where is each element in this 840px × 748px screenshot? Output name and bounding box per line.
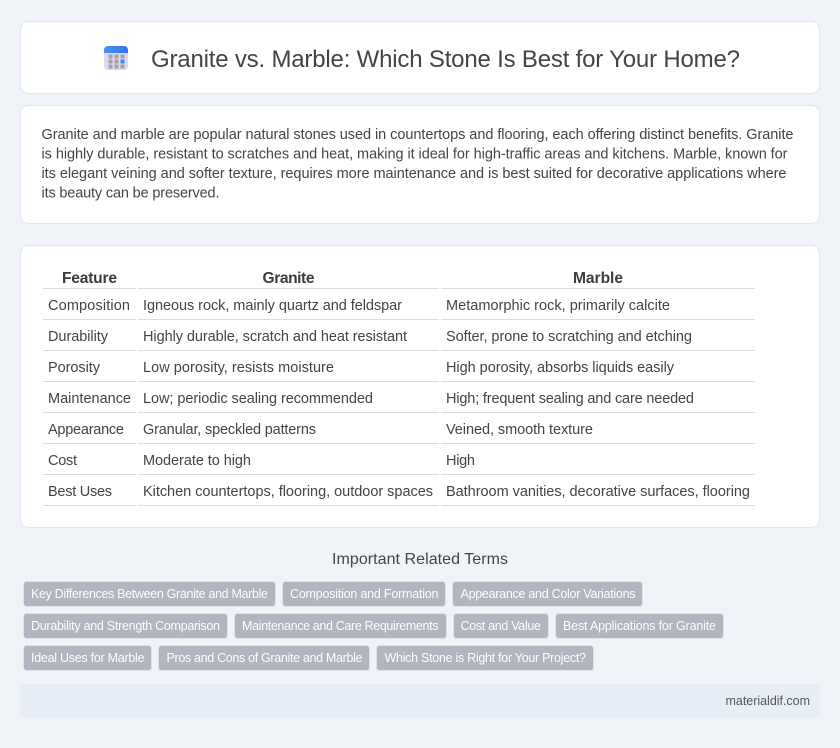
table header row: Feature xyxy=(62,270,117,287)
tag xyxy=(556,614,724,638)
heading: important related terms: Important Related Terms xyxy=(332,551,508,568)
table row: best uses: Best Uses xyxy=(48,484,112,500)
title: Granite vs. Marble: Which Stone Is Best for Your Home? xyxy=(151,46,740,73)
table row: composition: Composition xyxy=(48,298,130,314)
table row: best uses: Kitchen countertops, flooring, outdoor spaces xyxy=(143,484,433,500)
panel: comparison table xyxy=(20,246,820,528)
table row: durability: Highly durable, scratch and heat resistant xyxy=(143,329,407,345)
tag xyxy=(282,582,446,606)
tag: Durability and Strength Comparison xyxy=(31,619,220,633)
table row: porosity: Low porosity, resists moisture xyxy=(143,360,334,376)
table row: durability xyxy=(43,329,755,351)
intro paragraph: its elegant veining and softer texture, requires more maintenance and is best suited for decorative applications where xyxy=(42,166,786,182)
table row: cost: Cost xyxy=(48,453,77,469)
tag xyxy=(24,614,228,638)
table row: best uses xyxy=(43,484,755,506)
table row: maintenance: High; frequent sealing and care needed xyxy=(446,391,694,407)
table row: porosity: High porosity, absorbs liquids easily xyxy=(446,360,675,376)
table row: cost: Moderate to high xyxy=(143,453,251,469)
table row: maintenance: Low; periodic sealing recommended xyxy=(143,391,373,407)
table row: porosity: Porosity xyxy=(48,360,101,376)
tag xyxy=(454,614,548,638)
icon: calendar xyxy=(104,46,128,70)
footer xyxy=(20,684,820,718)
tag xyxy=(24,646,152,670)
intro paragraph: is highly durable, resistant to scratches and heat, making it ideal for high-traffic areas and kitchens. Marble, known for xyxy=(42,146,788,162)
table row: best uses: Bathroom vanities, decorative surfaces, flooring xyxy=(446,484,750,500)
tag: Best Applications for Granite xyxy=(563,619,716,633)
intro paragraph: its beauty can be preserved. xyxy=(42,186,220,202)
table header row: Marble xyxy=(573,270,623,287)
tag: Pros and Cons of Granite and Marble xyxy=(166,651,363,665)
table header row xyxy=(43,270,755,289)
tag xyxy=(234,614,446,638)
related terms tags xyxy=(24,582,724,670)
tag: Cost and Value xyxy=(460,619,541,633)
tag: Composition and Formation xyxy=(290,587,439,601)
table row: durability: Softer, prone to scratching and etching xyxy=(446,329,692,345)
tag xyxy=(452,582,642,606)
table row: cost: High xyxy=(446,453,475,469)
table row: appearance: Granular, speckled patterns xyxy=(143,422,316,438)
tag xyxy=(24,582,276,606)
tag: Ideal Uses for Marble xyxy=(31,651,145,665)
table row: composition xyxy=(43,298,755,320)
table row: appearance: Veined, smooth texture xyxy=(446,422,593,438)
table row: durability: Durability xyxy=(48,329,109,345)
table row: appearance: Appearance xyxy=(48,422,124,438)
panel: introduction xyxy=(20,106,820,224)
panel: header xyxy=(20,22,820,94)
tag xyxy=(376,646,594,670)
table row: maintenance xyxy=(43,391,755,413)
footer source text: materialdif.com xyxy=(726,694,810,708)
tag: Which Stone is Right for Your Project? xyxy=(384,651,586,665)
intro paragraph: Granite and marble are popular natural stones used in countertops and flooring, each offering distinct benefits. Granite xyxy=(42,127,794,143)
tag xyxy=(158,646,370,670)
table row: composition: Igneous rock, mainly quartz and feldspar xyxy=(143,298,402,314)
tag: Appearance and Color Variations xyxy=(460,587,636,601)
table row: composition: Metamorphic rock, primarily calcite xyxy=(446,298,670,314)
table header row: Granite xyxy=(262,270,315,287)
tag: Key Differences Between Granite and Marble xyxy=(31,587,268,601)
table row: maintenance: Maintenance xyxy=(48,391,131,407)
tag: Maintenance and Care Requirements xyxy=(242,619,438,633)
table row: appearance xyxy=(43,422,755,444)
intro paragraph xyxy=(42,127,794,202)
table row: cost xyxy=(43,453,755,475)
table row: porosity xyxy=(43,360,755,382)
